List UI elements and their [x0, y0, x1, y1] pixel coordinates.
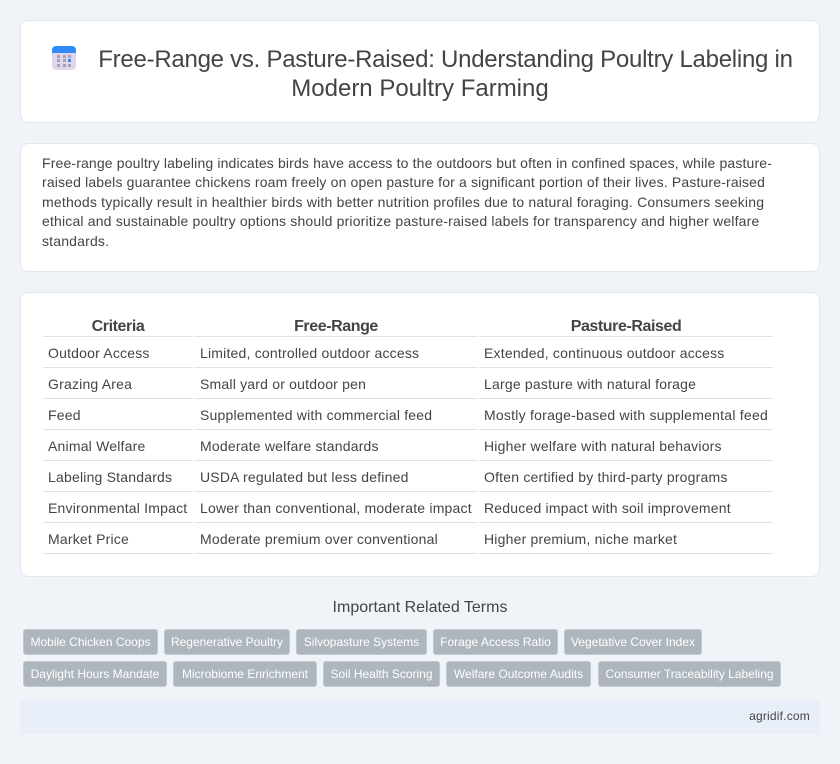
text block: summary paragraph: ethical and sustainable poultry options should prioritize pasture-raised labels for transparency and higher welfare: [42, 213, 759, 229]
table header: Pasture-Raised: [571, 318, 681, 335]
row: animal welfare: Moderate welfare standards: [200, 438, 379, 454]
related term tags: Microbiome Enrichment: [182, 667, 308, 681]
row: market price: Higher premium, niche market: [484, 531, 677, 547]
row: grazing area: Small yard or outdoor pen: [200, 376, 366, 392]
text block: summary paragraph: [42, 155, 772, 249]
row: outdoor access: [48, 345, 724, 361]
table header: [92, 318, 681, 335]
row: grazing area: [48, 376, 696, 392]
row: animal welfare: Animal Welfare: [48, 438, 145, 454]
related term tags: Consumer Traceability Labeling: [605, 667, 774, 681]
row: outdoor access: Outdoor Access: [48, 345, 150, 361]
footer source: agridif.com: [749, 709, 810, 723]
related term tags: Forage Access Ratio: [440, 635, 551, 649]
related term tags: Soil Health Scoring: [330, 667, 433, 681]
row: grazing area: Large pasture with natural forage: [484, 376, 696, 392]
row: labeling standards: Often certified by third-party programs: [484, 469, 728, 485]
related term tags: [23, 629, 781, 687]
row: environmental impact: Lower than conventional, moderate impact: [200, 500, 472, 516]
related term tags: Silvopasture Systems: [304, 635, 419, 649]
row: labeling standards: USDA regulated but less defined: [200, 469, 409, 485]
row: labeling standards: Labeling Standards: [48, 469, 172, 485]
text block: summary paragraph: methods typically result in healthier birds with better nutrition profiles due to natural foraging. Consumers seeking: [42, 194, 764, 210]
related term tags: Welfare Outcome Audits: [454, 667, 583, 681]
row: feed: Mostly forage-based with supplemental feed: [484, 407, 768, 423]
row: labeling standards: [48, 469, 728, 485]
row: market price: [48, 531, 677, 547]
row: animal welfare: Higher welfare with natural behaviors: [484, 438, 722, 454]
footer bar: [20, 700, 820, 734]
icon: calendar: [52, 46, 76, 70]
table header: Criteria: [92, 318, 144, 335]
text block: summary paragraph: Free-range poultry labeling indicates birds have access to the outdoors but often in confined spaces, while pasture-: [42, 155, 772, 171]
related term tags: Daylight Hours Mandate: [31, 667, 159, 681]
row: animal welfare: [48, 438, 722, 454]
heading: important related terms: Important Related Terms: [333, 599, 507, 616]
title: Free-Range vs. Pasture-Raised: Understanding Poultry Labeling in: [98, 46, 793, 73]
title: Modern Poultry Farming: [291, 75, 549, 102]
text block: summary paragraph: raised labels guarantee chickens roam freely on open pasture for a significant portion of their lives. Pasture-raised: [42, 174, 765, 190]
table header: Free-Range: [294, 318, 378, 335]
related term tags: Mobile Chicken Coops: [30, 635, 151, 649]
related term tags: Regenerative Poultry: [171, 635, 283, 649]
related term tags: Vegetative Cover Index: [571, 635, 695, 649]
comparison table: [43, 318, 773, 554]
panel: comparison table: [20, 292, 820, 577]
row: outdoor access: Extended, continuous outdoor access: [484, 345, 724, 361]
row: environmental impact: [48, 500, 731, 516]
title: [98, 46, 793, 102]
row: market price: Moderate premium over conventional: [200, 531, 438, 547]
row: feed: Feed: [48, 407, 81, 423]
row: market price: Market Price: [48, 531, 129, 547]
text block: summary paragraph: standards.: [42, 233, 109, 249]
row: environmental impact: Environmental Impact: [48, 500, 187, 516]
row: environmental impact: Reduced impact with soil improvement: [484, 500, 731, 516]
panel: summary: [20, 143, 820, 272]
row: feed: [48, 407, 768, 423]
panel: header: [20, 20, 820, 123]
row: feed: Supplemented with commercial feed: [200, 407, 432, 423]
row: outdoor access: Limited, controlled outdoor access: [200, 345, 419, 361]
row: grazing area: Grazing Area: [48, 376, 132, 392]
